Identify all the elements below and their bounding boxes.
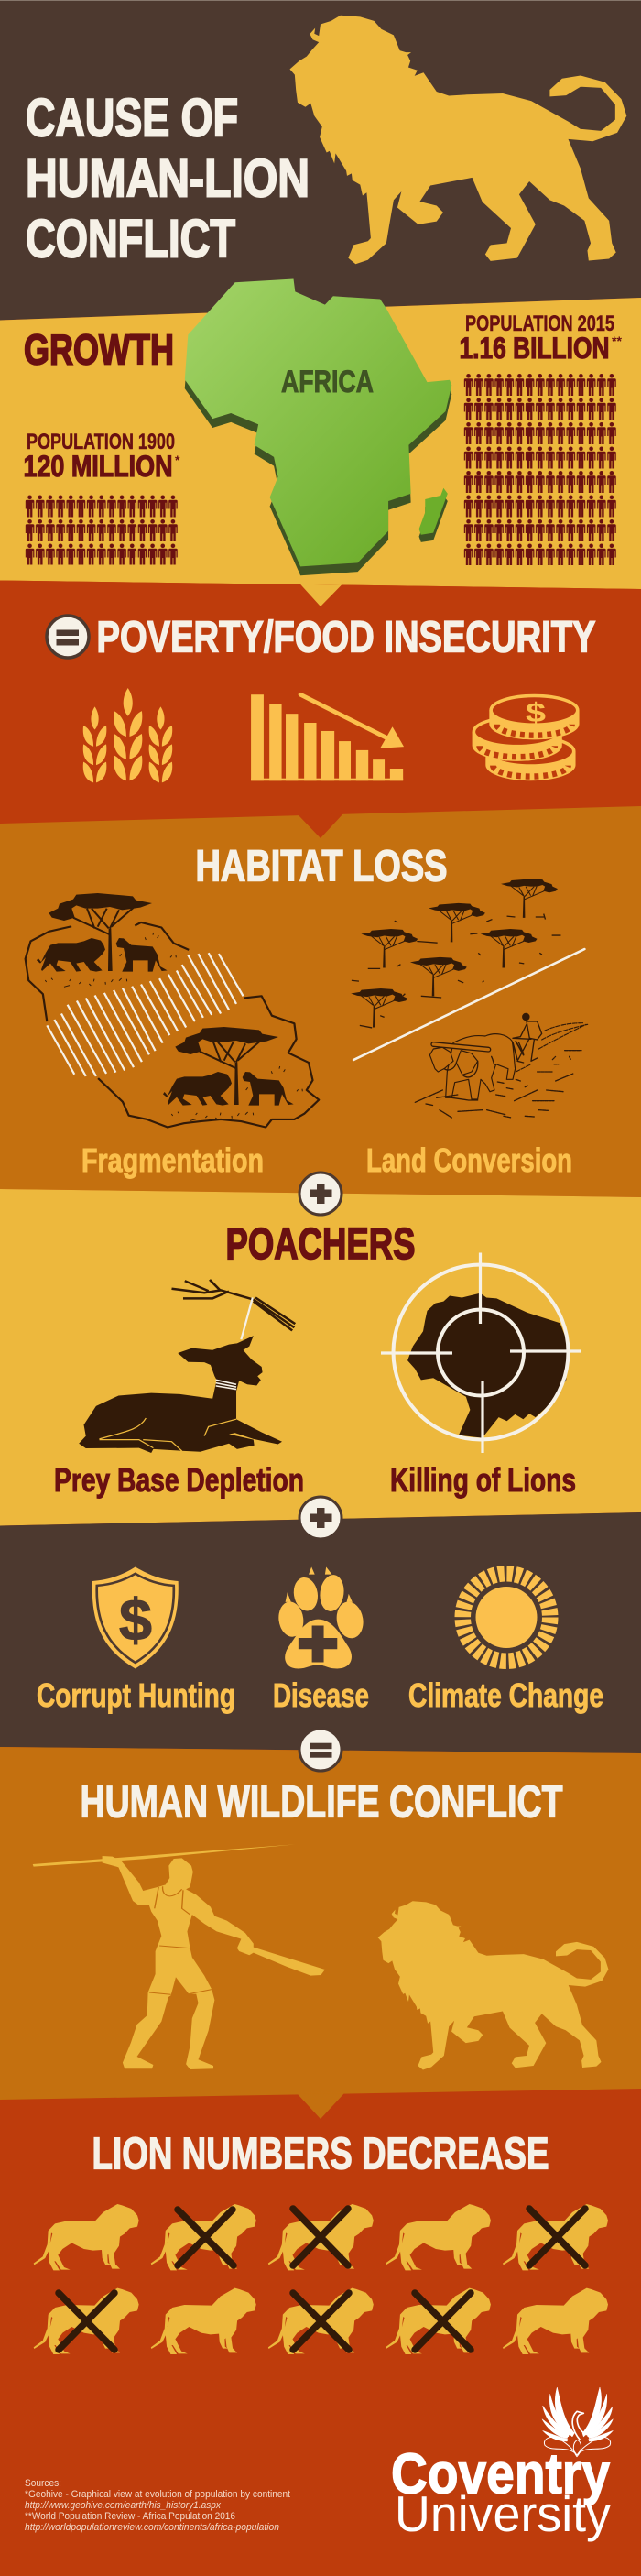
crosses over lost lions: [59, 2209, 585, 2350]
dividing line: [353, 949, 584, 1060]
title: [26, 88, 310, 269]
sources: http://www.geohive.com/earth/his_history1.aspx: [25, 2500, 221, 2511]
fragmented habitat outlines: [26, 922, 319, 1127]
sources: Sources:: [25, 2478, 61, 2489]
icon: shield with dollar: $: [119, 1587, 152, 1653]
icon: sun: [462, 1574, 550, 1661]
lower tree and lions: [163, 1027, 302, 1120]
badge: plus: [299, 1497, 342, 1539]
title: CONFLICT: [26, 209, 235, 269]
logo: Coventry University: Coventry: [391, 2442, 610, 2506]
logo: Coventry University: [391, 2387, 613, 2542]
labels: dark panel: [37, 1676, 603, 1714]
illustration: snared antelope: [79, 1280, 295, 1453]
logo: Coventry University: University: [395, 2485, 611, 2542]
illustration: land conversion: [351, 879, 588, 1118]
labels: dark panel: Disease: [273, 1676, 369, 1714]
heading: growth: GROWTH: [24, 326, 174, 374]
stat: population 2015: **: [612, 333, 623, 348]
stat: population 1900: 120 MILLION: [24, 450, 172, 483]
labels: dark panel: Corrupt Hunting: [37, 1676, 235, 1714]
label: prey base depletion: Prey Base Depletion: [54, 1461, 304, 1499]
pictogram: 2015 population: [463, 374, 617, 565]
icon: paw with medical cross: [277, 1566, 365, 1668]
illustration: fragmentation: [26, 893, 319, 1127]
illustration: hunter with spear and machete: [33, 1844, 325, 2069]
phoenix crest: [542, 2387, 613, 2457]
icon: wheat: [83, 688, 172, 782]
label: Africa: AFRICA: [281, 365, 374, 399]
acacia trees: [351, 879, 558, 1028]
snare string: [241, 1298, 253, 1339]
label: fragmentation: Fragmentation: [81, 1141, 264, 1179]
sources: *Geohive - Graphical view at evolution of population by continent: [25, 2489, 290, 2500]
icon: shield with dollar: [92, 1566, 179, 1668]
sources: **World Population Review - Africa Population 2016: [25, 2511, 235, 2522]
oxen and ploughman: [415, 1013, 588, 1118]
pictogram: 1900 population: [25, 495, 179, 564]
sources: http://worldpopulationreview.com/continents/africa-population: [25, 2522, 279, 2533]
illustration: lion in crosshairs: [381, 1253, 581, 1453]
dollar sign on coin: $: [526, 698, 546, 728]
antelope body: [79, 1336, 282, 1453]
heading: poachers: POACHERS: [225, 1220, 416, 1269]
badge: equals: [47, 616, 89, 658]
icon: falling bar chart: [251, 694, 404, 780]
icon: coins: [473, 696, 580, 780]
sources: [25, 2478, 290, 2533]
stat: population 1900: [24, 430, 180, 483]
upper tree and lions: [37, 893, 176, 987]
stat: population 1900: POPULATION 1900: [27, 430, 175, 454]
label: killing of lions: Killing of Lions: [390, 1461, 576, 1499]
stat: population 2015: 1.16 BILLION: [460, 332, 610, 365]
title: HUMAN-LION: [26, 148, 310, 209]
heading: habitat loss: HABITAT LOSS: [196, 843, 447, 890]
badge: equals: [299, 1729, 342, 1771]
icon: big lion silhouette: [289, 16, 626, 264]
illustration: lion silhouette: [378, 1901, 608, 2069]
branch: [171, 1280, 295, 1330]
title: CAUSE OF: [26, 88, 238, 148]
stat: population 1900: *: [175, 453, 180, 467]
map of Africa: [185, 279, 451, 575]
pictogram: ten lions: [34, 2204, 608, 2354]
stat: population 2015: [460, 311, 623, 365]
label: land conversion: Land Conversion: [366, 1141, 572, 1179]
white stripes: lost habitat: [47, 953, 244, 1076]
badge: plus: [299, 1173, 342, 1215]
